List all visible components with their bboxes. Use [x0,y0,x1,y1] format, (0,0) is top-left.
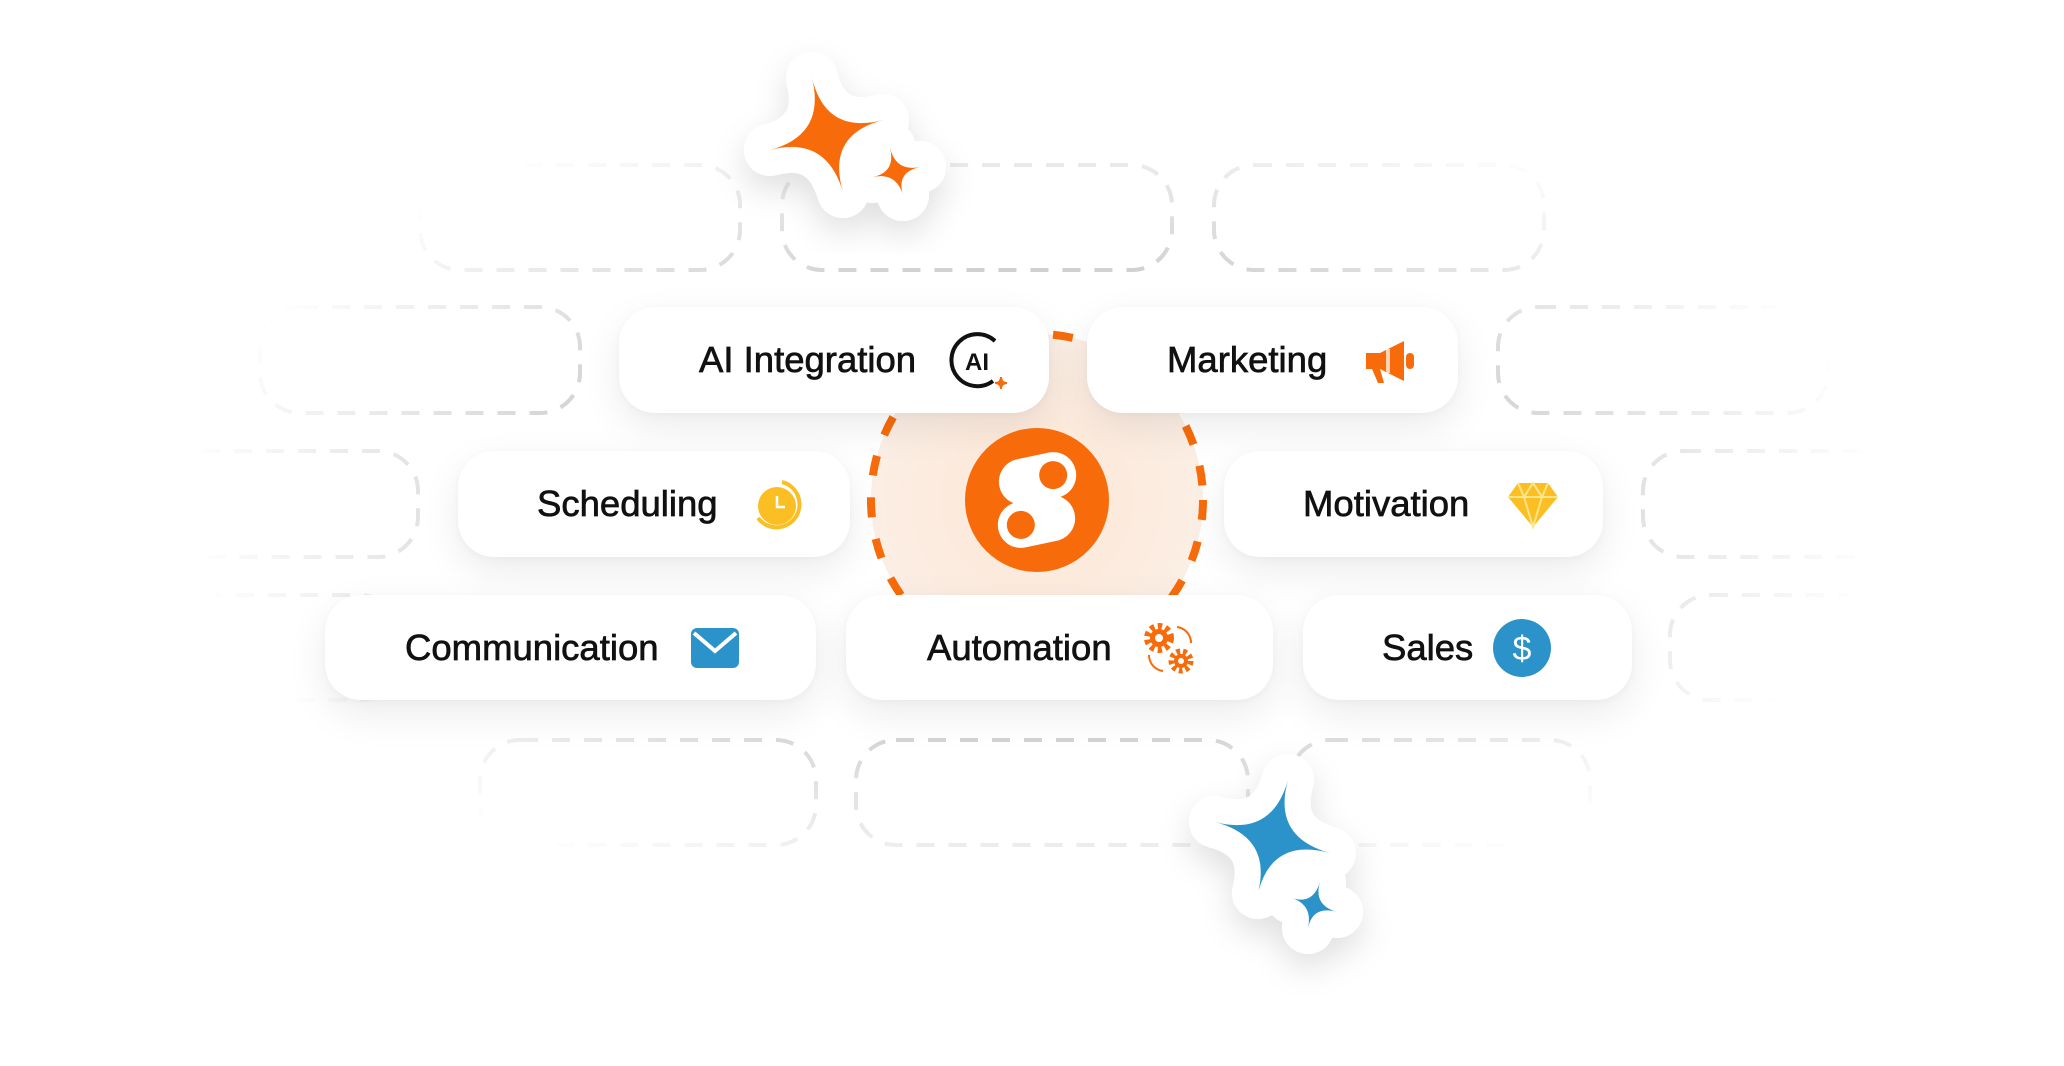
icon: AI: AI [965,349,989,376]
background dashed pills [266,163,1797,847]
label: Marketing: Marketing [1167,339,1327,380]
icon: megaphone [1366,341,1414,383]
icon: AI [949,332,1007,389]
label: Scheduling: Scheduling [537,483,718,524]
icon: gears [1144,623,1194,674]
icon: mail [691,628,739,668]
icon: diamond [1508,481,1558,529]
icon: blue sparkles [1215,780,1337,928]
icon: dollar [1493,619,1551,677]
label: Motivation: Motivation [1303,483,1469,524]
pill: Communication [325,595,816,700]
pill: Automation [846,595,1273,700]
icon: dollar: $ [1513,630,1532,668]
label: Communication: Communication [405,627,659,668]
label: Sales: Sales [1382,627,1473,668]
label: Automation: Automation [927,627,1112,668]
icon: orange sparkles [770,78,920,195]
pill: Marketing [1087,307,1458,413]
icon: clock [756,480,802,530]
pill: AI Integration [619,307,1049,413]
pill: Sales [1303,595,1632,700]
pill: Scheduling [458,451,850,557]
pill: Motivation [1224,451,1603,557]
label: AI Integration: AI Integration [699,339,916,380]
center logo [965,428,1109,572]
